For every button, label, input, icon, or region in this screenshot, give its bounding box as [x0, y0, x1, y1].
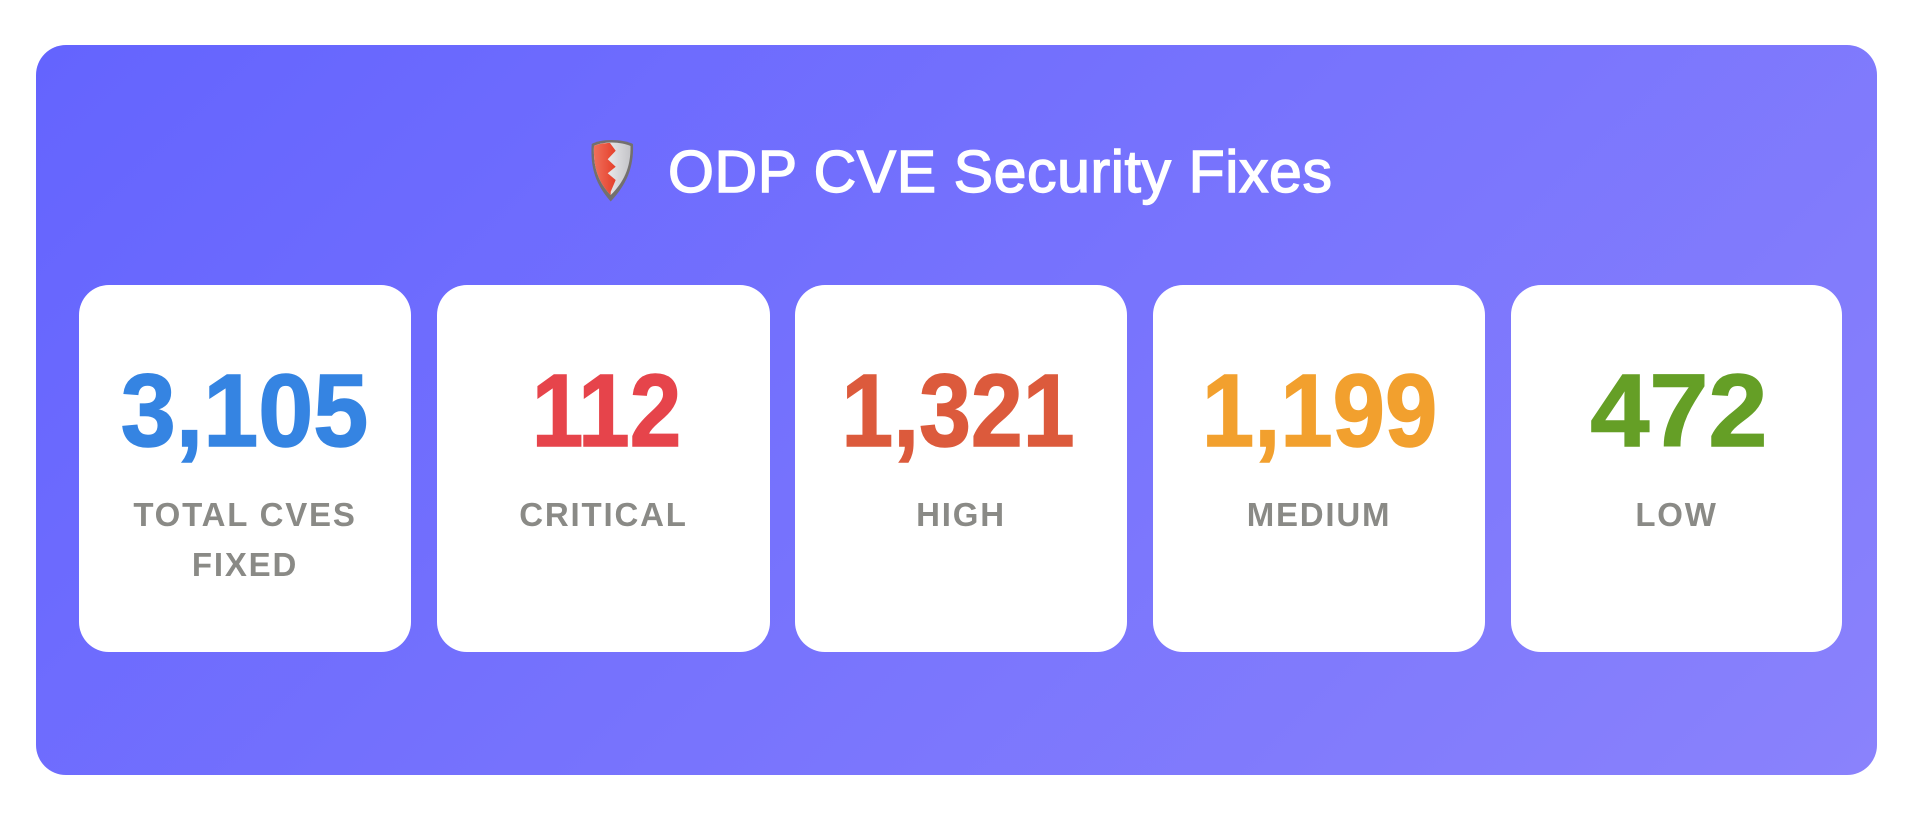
- number: total: 3,105: [121, 353, 368, 468]
- title: ODP CVE Security Fixes: [668, 139, 1333, 205]
- number: high: 1,321: [841, 353, 1075, 468]
- card: critical: [437, 285, 770, 652]
- label: medium: MEDIUM: [1247, 496, 1391, 533]
- card: medium: [1153, 285, 1485, 652]
- card: total CVEs fixed: [79, 285, 411, 652]
- label: total: FIXED: [192, 546, 298, 583]
- label: total: [133, 496, 357, 583]
- label: low: LOW: [1635, 496, 1718, 533]
- label: high: HIGH: [916, 496, 1006, 533]
- label: critical: CRITICAL: [519, 496, 688, 533]
- number: low: 472: [1590, 353, 1767, 468]
- number: medium: 1,199: [1202, 353, 1437, 468]
- card: low: [1511, 285, 1842, 652]
- icon: shield: [591, 140, 634, 202]
- label: total: TOTAL CVES: [133, 496, 357, 533]
- card: high: [795, 285, 1127, 652]
- number: critical: 112: [532, 353, 681, 468]
